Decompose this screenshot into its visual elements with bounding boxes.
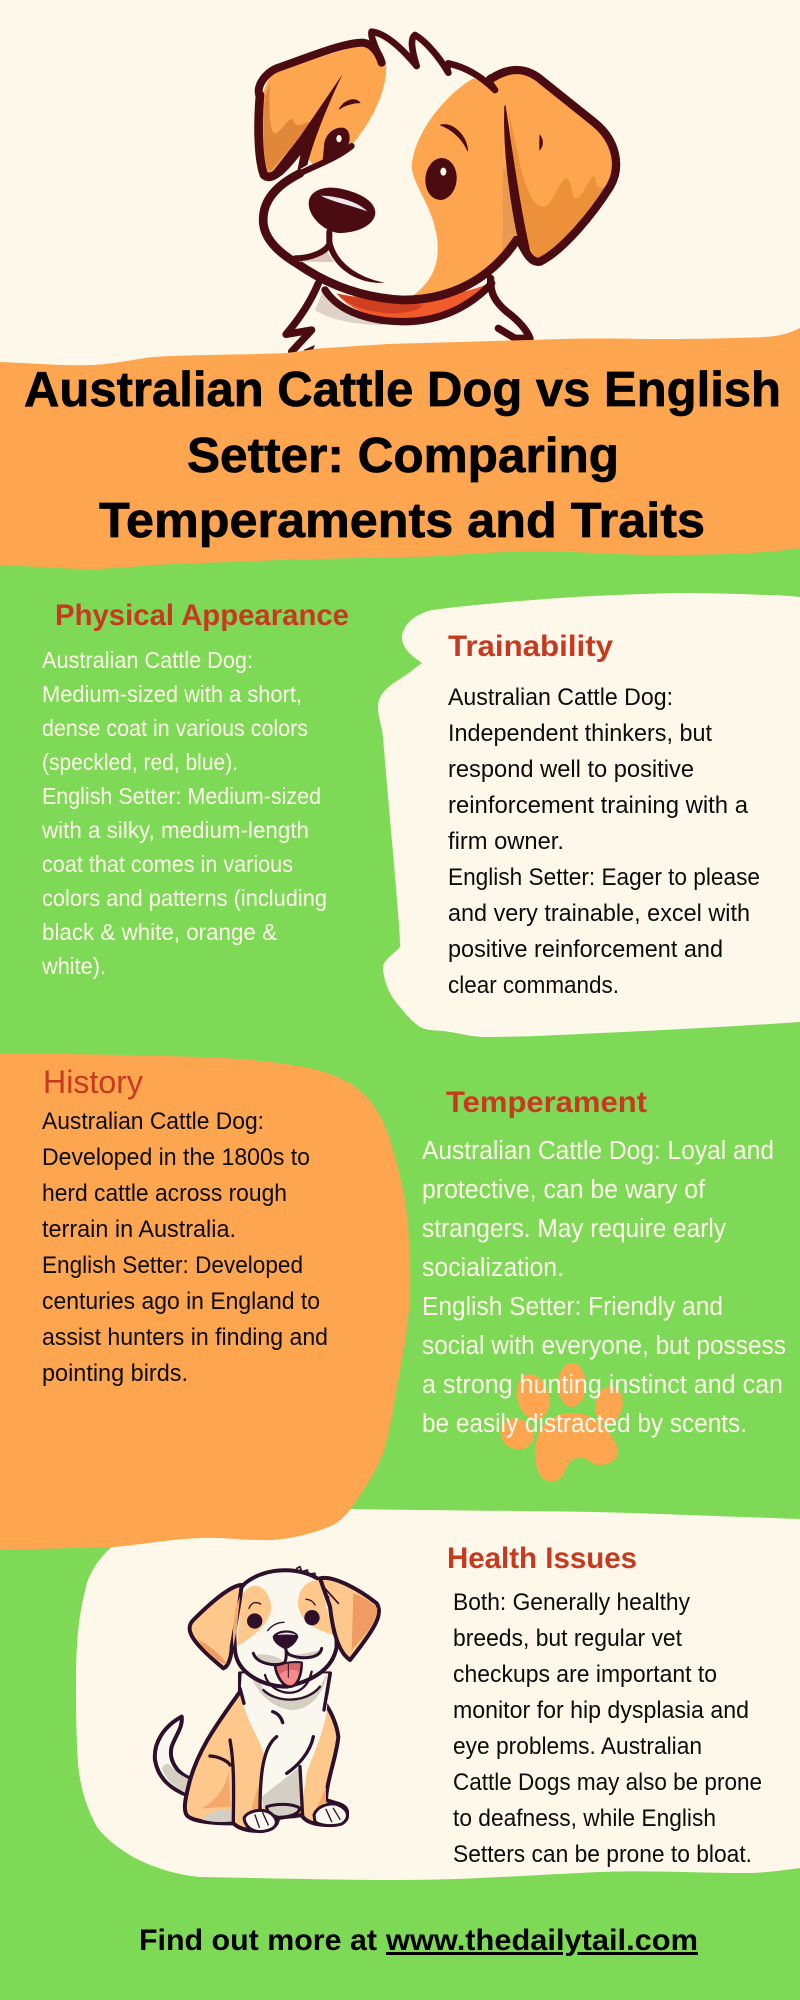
text: physical appearance body: dense coat in various colors	[42, 715, 308, 741]
text: trainability body: Australian Cattle Dog:	[448, 684, 673, 711]
left ear	[190, 1585, 242, 1668]
text: physical appearance body: coat that comes in various	[42, 851, 293, 877]
panel shape	[0, 1053, 410, 1550]
text: temperament body	[422, 1137, 786, 1438]
text: trainability body: English Setter: Eager to please	[448, 864, 760, 891]
footer: call to action: www.thedailytail.com	[385, 1924, 698, 1957]
text: history body: centuries ago in England to	[42, 1288, 320, 1315]
footer: call to action	[139, 1924, 698, 1957]
neck lines	[286, 283, 318, 352]
panel: history	[0, 1053, 410, 1550]
text: physical appearance body: Medium-sized with a short,	[42, 681, 302, 707]
head outline	[263, 173, 517, 300]
text: history body: English Setter: Developed	[42, 1252, 303, 1279]
text: health issues body: breeds, but regular vet	[453, 1625, 682, 1652]
text: history body: terrain in Australia.	[42, 1216, 236, 1243]
neck shadow	[315, 290, 387, 325]
paws	[267, 1804, 300, 1817]
text: trainability body: Independent thinkers, but	[448, 720, 712, 747]
text: temperament body: protective, can be wary of	[422, 1176, 706, 1204]
panel: health issues background	[76, 1500, 800, 1880]
text: physical appearance body: colors and patterns (including	[42, 885, 327, 911]
left ear and eye patch	[260, 45, 386, 177]
brows	[441, 125, 468, 151]
text: history body: Australian Cattle Dog:	[42, 1108, 264, 1135]
heading: trainability: Trainability	[448, 630, 613, 663]
body	[185, 1673, 347, 1831]
face orange patch	[412, 78, 517, 297]
text: health issues body: monitor for hip dysplasia and	[453, 1697, 749, 1724]
text: physical appearance body: with a silky, medium-length	[41, 817, 309, 843]
text: health issues body: to deafness, while English	[453, 1805, 716, 1832]
nose	[273, 1630, 298, 1649]
text: trainability body: positive reinforcement and	[448, 936, 723, 963]
heading: history: History	[43, 1064, 143, 1100]
text: temperament body: Australian Cattle Dog: Loyal and	[422, 1137, 774, 1165]
section: temperament	[422, 1086, 786, 1438]
text: health issues body: Setters can be prone to bloat.	[453, 1841, 752, 1868]
cheeks	[257, 1654, 283, 1665]
text: physical appearance body	[41, 647, 327, 979]
text: health issues body: Cattle Dogs may also be prone	[453, 1769, 762, 1796]
text: trainability body: firm owner.	[448, 828, 564, 855]
text: trainability body: respond well to positive	[448, 756, 694, 783]
title	[24, 363, 781, 548]
title: Temperaments and Traits	[99, 494, 705, 548]
text: temperament body: socialization.	[422, 1254, 564, 1282]
illustration: sitting puppy	[155, 1567, 379, 1832]
text: temperament body: social with everyone, but possess	[422, 1332, 786, 1360]
neck shading	[250, 1668, 327, 1710]
collar	[337, 285, 485, 319]
text: history body: Developed in the 1800s to	[42, 1144, 310, 1171]
text: history body	[42, 1108, 328, 1387]
text: trainability body: clear commands.	[448, 972, 619, 999]
text: trainability body	[448, 684, 760, 999]
tail	[155, 1717, 190, 1795]
heading: physical appearance: Physical Appearance	[55, 599, 349, 632]
eyes	[323, 128, 350, 160]
heading: temperament: Temperament	[446, 1086, 647, 1119]
text: temperament body: English Setter: Friendly and	[422, 1293, 723, 1321]
right ear	[492, 70, 616, 262]
text: health issues body: eye problems. Australian	[453, 1733, 702, 1760]
text: trainability body: reinforcement training with a	[448, 792, 749, 819]
text: health issues body: Both: Generally healthy	[453, 1589, 690, 1616]
text: trainability body: and very trainable, excel with	[448, 900, 750, 927]
mouth	[298, 250, 334, 262]
hair tuft	[297, 1567, 315, 1578]
text: health issues body: checkups are important to	[453, 1661, 717, 1688]
text: temperament body: be easily distracted by scents.	[422, 1410, 747, 1438]
title band: orange	[0, 328, 800, 569]
back paw shading	[202, 1809, 232, 1822]
text: history body: assist hunters in finding and	[42, 1324, 328, 1351]
title: Australian Cattle Dog vs English	[24, 363, 781, 417]
text: temperament body: a strong hunting instinct and can	[422, 1371, 783, 1399]
hair tufts	[371, 32, 495, 90]
text: history body: herd cattle across rough	[42, 1180, 287, 1207]
eyes and brows	[247, 1613, 262, 1629]
section: physical appearance	[41, 599, 349, 979]
icon: paw print	[495, 1363, 626, 1482]
illustration: dog head	[259, 32, 616, 353]
mouth	[275, 1662, 302, 1687]
head	[234, 1570, 337, 1687]
text: physical appearance body: black & white, orange &	[42, 919, 277, 945]
panel: trainability	[378, 593, 800, 1037]
heading: health issues: Health Issues	[447, 1542, 637, 1575]
footer: call to action: Find out more at	[139, 1924, 377, 1957]
header: cream band	[0, 0, 800, 370]
leg lines	[210, 1673, 330, 1823]
text: physical appearance body: Australian Cattle Dog:	[42, 647, 253, 673]
text: physical appearance body: white).	[41, 953, 106, 979]
text: physical appearance body: English Setter: Medium-sized	[42, 783, 321, 809]
text: history body: pointing birds.	[42, 1360, 188, 1387]
text: health issues body	[453, 1589, 762, 1868]
right ear	[320, 1578, 379, 1660]
text: temperament body: strangers. May require early	[422, 1215, 726, 1243]
title: Setter: Comparing	[187, 429, 619, 483]
section: health issues	[447, 1542, 762, 1868]
chest	[241, 1673, 330, 1807]
nose	[309, 188, 375, 233]
text: physical appearance body: (speckled, red, blue).	[42, 749, 238, 775]
panel shape	[378, 593, 800, 1037]
head patches	[237, 1586, 271, 1647]
